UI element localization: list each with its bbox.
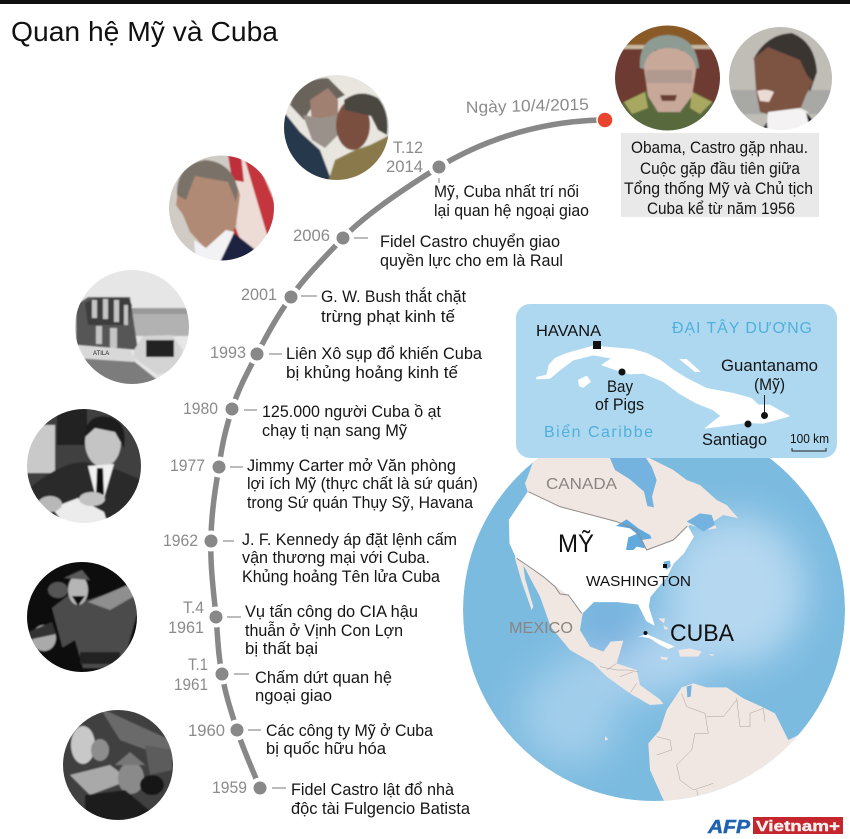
event: 1960: bị quốc hữu hóa — [266, 740, 387, 758]
globe map: WASHINGTON — [586, 573, 691, 590]
label: Caribbean Sea: Biển Caribbe — [544, 423, 653, 441]
event: T.12 2014: 2014 — [386, 158, 423, 176]
event: 1993 — [210, 344, 483, 382]
title: Quan hệ Mỹ và Cuba — [11, 16, 278, 47]
photo: Fidel Castro with rebels — [25, 560, 140, 675]
globe map: CUBA — [670, 620, 734, 647]
globe map — [463, 458, 845, 801]
event: T.12 2014: Mỹ, Cuba nhất trí nối — [434, 183, 579, 201]
photo: refugee boats — [75, 270, 189, 384]
label: Havana: HAVANA — [536, 323, 601, 340]
globe map: MỸ — [558, 529, 594, 558]
label: Havana — [536, 323, 601, 349]
callout: Obama Castro meeting: Tổng thống Mỹ và Chủ tịch — [624, 180, 813, 198]
top rule — [0, 0, 850, 4]
event: 1962: vận thương mại với Cuba. — [242, 549, 430, 567]
callout: Obama Castro meeting: Cuba kể từ năm 1956 — [647, 200, 795, 218]
callout: Obama Castro meeting — [621, 133, 819, 218]
event: 1977: 1977 — [170, 457, 205, 475]
event: 2006: quyền lực cho em là Raul — [380, 252, 563, 270]
event: T.4 1961: thuẫn ở Vịnh Con Lợn — [245, 621, 403, 640]
logo: AFP Vietnam+: Vietnam+ — [756, 818, 840, 835]
label: Guantanamo: (Mỹ) — [754, 376, 785, 394]
event: 1959: Fidel Castro lật đổ nhà — [291, 781, 455, 799]
event: 1962: J. F. Kennedy áp đặt lệnh cấm — [242, 531, 457, 549]
Great Lakes — [616, 519, 652, 550]
event: 2001: 2001 — [241, 286, 277, 304]
label: Guantanamo: Guantanamo — [721, 357, 818, 375]
borders — [528, 492, 687, 550]
label: Guantanamo — [721, 357, 818, 419]
label: Santiago — [702, 420, 767, 449]
Hudson Bay — [609, 457, 657, 507]
photo: Castro with guerrillas — [63, 710, 173, 820]
event: 1977: Jimmy Carter mở Văn phòng — [247, 457, 456, 475]
globe labels: CANADA — [546, 476, 617, 493]
event: T.12 2014: lại quan hệ ngoại giao — [434, 202, 589, 220]
logo: AFP Vietnam+: AFP — [707, 817, 751, 837]
event: 1980 — [183, 400, 441, 440]
event: 1959 — [212, 779, 471, 818]
globe map: MEXICO — [509, 620, 573, 637]
event: 1980: chạy tị nạn sang Mỹ — [262, 422, 408, 440]
event: 1960: Các công ty Mỹ ở Cuba — [266, 722, 434, 740]
event: T.4 1961 — [168, 599, 418, 658]
event: T.12 2014 — [386, 139, 589, 220]
event: T.1 1961: T.1 — [188, 656, 208, 674]
photo: John F. Kennedy — [27, 409, 141, 523]
North America land — [515, 457, 738, 705]
event: T.1 1961: Chấm dứt quan hệ — [255, 669, 392, 687]
event: T.4 1961: 1961 — [168, 619, 204, 637]
event: 1962 — [163, 531, 457, 586]
label: Santiago: Santiago — [702, 431, 767, 449]
event: 1980: 125.000 người Cuba ồ ạt — [262, 403, 441, 421]
event: 1993: 1993 — [210, 344, 246, 362]
inset map: Cuba — [516, 304, 837, 458]
event: 1959: 1959 — [212, 779, 247, 797]
callout: Obama Castro meeting: Cuộc gặp đầu tiên giữa — [640, 160, 801, 178]
event: 2006: 2006 — [293, 227, 330, 245]
event: 2006: Fidel Castro chuyển giao — [380, 233, 560, 251]
South America — [648, 683, 798, 801]
event: 1960 — [188, 722, 434, 758]
event: 1962: Khủng hoảng Tên lửa Cuba — [242, 568, 441, 586]
event: 2001: trừng phạt kinh tế — [321, 308, 455, 326]
event: 1959: độc tài Fulgencio Batista — [291, 800, 471, 818]
event: 2001 — [241, 286, 466, 326]
timeline end: 10/4/2015: Ngày 10/4/2015 — [466, 96, 589, 117]
event: 1962: 1962 — [163, 532, 198, 550]
callout: Obama Castro meeting: Obama, Castro gặp nhau. — [631, 139, 808, 157]
Cuba island shape — [537, 346, 789, 428]
event: T.1 1961: 1961 — [174, 676, 208, 694]
photo: Fidel and Raul Castro — [284, 75, 389, 180]
event: 1980: 1980 — [183, 400, 218, 418]
event: 1977: lợi ích Mỹ (thực chất là sứ quán) — [247, 475, 478, 493]
event: 1977 — [170, 457, 478, 512]
Cuba island — [637, 634, 675, 649]
Caribbean islands — [605, 618, 715, 741]
label: Bay of Pigs: of Pigs — [595, 396, 644, 414]
event: 2006 — [293, 227, 563, 270]
event: T.4 1961: T.4 — [183, 599, 204, 617]
event: 2001: G. W. Bush thắt chặt — [321, 287, 466, 306]
logo: AFP Vietnam+ — [707, 817, 843, 837]
event: 1993: bị khủng hoảng kinh tế — [286, 364, 458, 382]
timeline end: 10/4/2015 — [466, 96, 613, 128]
event: T.4 1961: Vụ tấn công do CIA hậu — [245, 603, 418, 621]
photo: Raul Castro — [615, 26, 720, 130]
photo: Barack Obama — [729, 27, 832, 130]
event: 1977: trong Sứ quán Thụy Sỹ, Havana — [247, 494, 474, 512]
event: T.4 1961: bị thất bại — [245, 640, 318, 658]
photo: refugee boats: ATILA — [93, 351, 109, 357]
timeline curve — [211, 120, 600, 788]
event: 1993: Liên Xô sụp đổ khiến Cuba — [286, 345, 483, 363]
event: 1960: 1960 — [188, 722, 225, 740]
event: T.1 1961: ngoại giao — [255, 687, 332, 705]
United States — [509, 492, 693, 625]
event: T.12 2014: T.12 — [393, 139, 423, 157]
photo: George W. Bush — [169, 156, 274, 260]
event: T.1 1961 — [174, 656, 392, 705]
label: Atlantic Ocean: ĐẠI TÂY DƯƠNG — [672, 318, 812, 337]
label: Bay of Pigs — [595, 368, 644, 414]
scale bar: 100 km — [790, 432, 829, 446]
label: Bay of Pigs: Bay — [607, 378, 634, 396]
